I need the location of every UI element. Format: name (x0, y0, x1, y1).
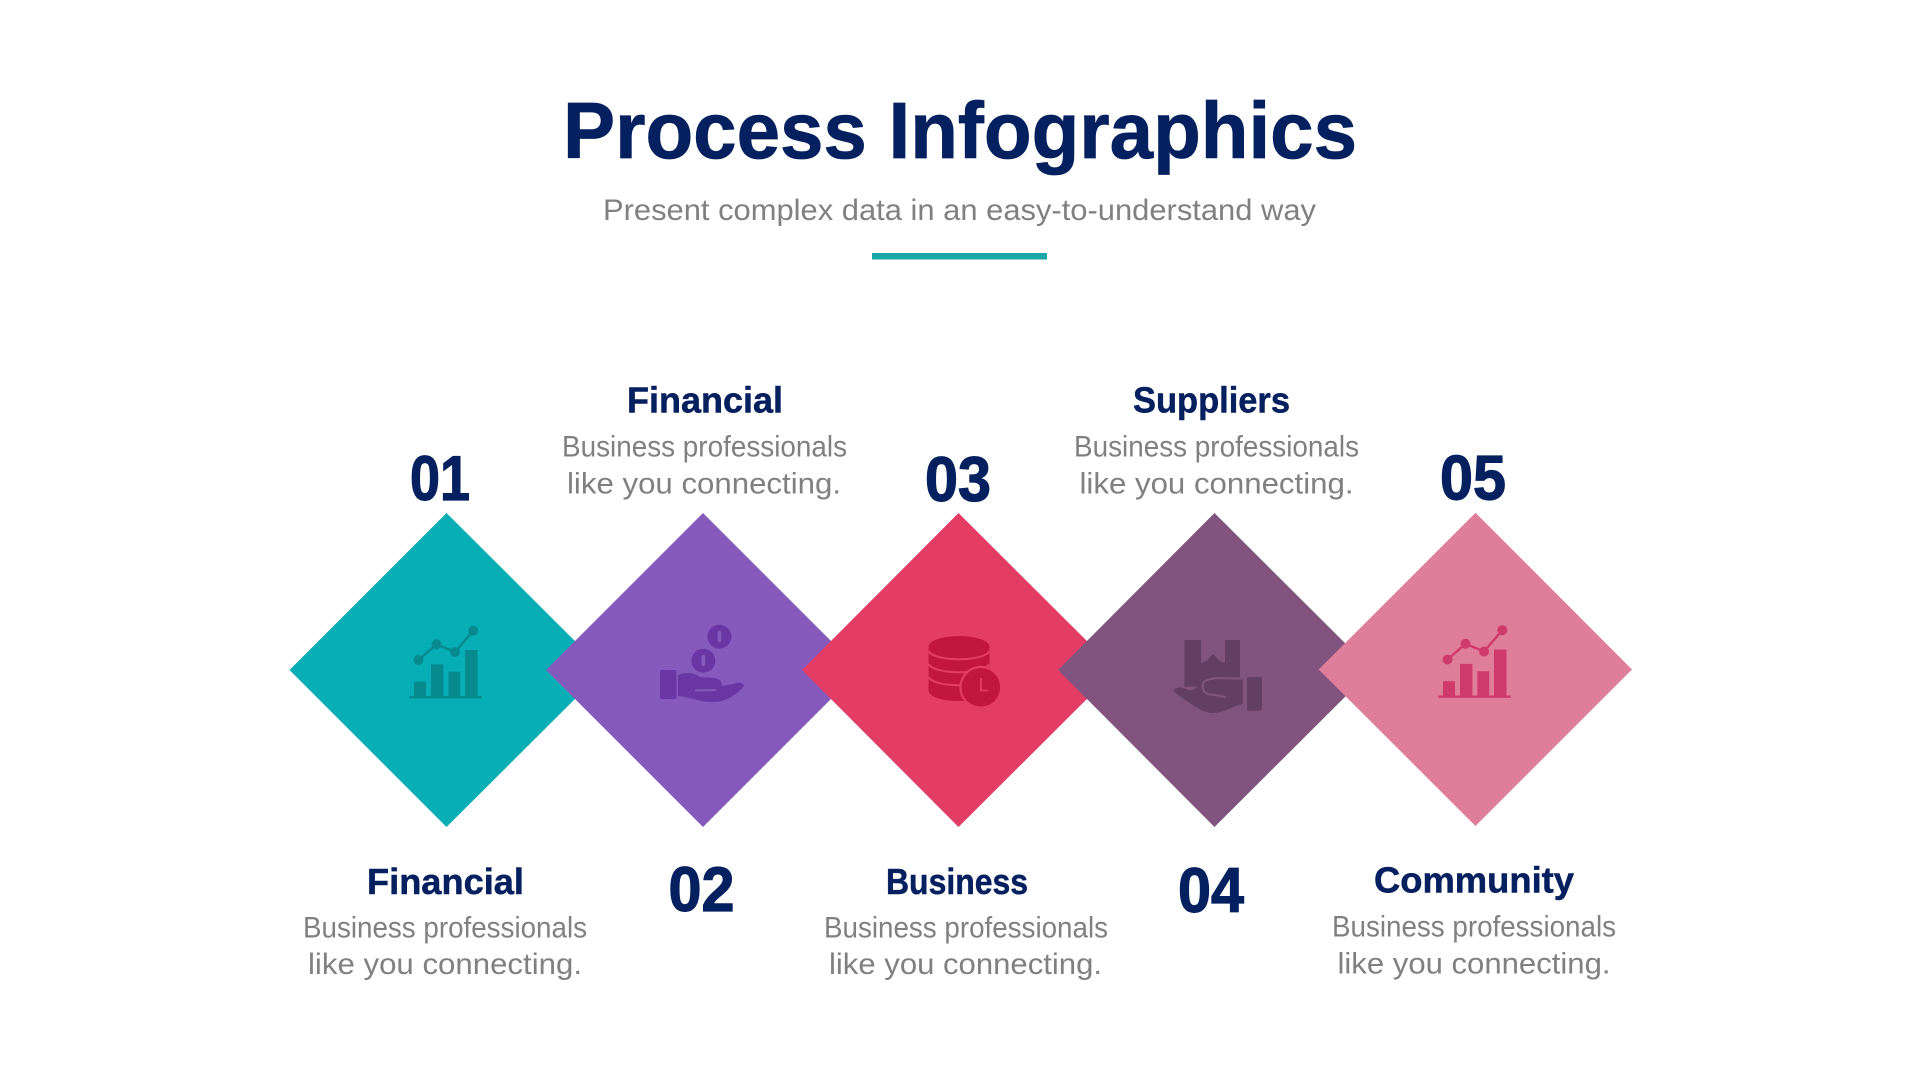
body text 01: Business professionals (303, 912, 587, 944)
diamond 01 (290, 513, 604, 827)
step 05 (1319, 444, 1632, 980)
accent underline (872, 253, 1047, 260)
body text 02: Business professionals (562, 431, 847, 464)
diamond 03 (802, 513, 1116, 827)
heading: Financial: Financial (627, 380, 783, 421)
number 05: 05 (1440, 444, 1506, 514)
icon: bar chart with trend line (1438, 625, 1511, 698)
header (563, 86, 1357, 260)
subtitle: Present complex data in an easy-to-understand way (603, 194, 1316, 227)
step 03 (802, 445, 1116, 981)
step 01 (290, 444, 604, 981)
diamond 04 (1058, 513, 1372, 827)
body text 03: Business professionals (824, 912, 1108, 944)
diamond 05 (1319, 513, 1632, 826)
icon: hand with coins (660, 625, 744, 702)
heading: Suppliers: Suppliers (1133, 380, 1290, 421)
number 03: 03 (925, 445, 991, 515)
title: Process Infographics (563, 86, 1357, 175)
step 02 (546, 380, 860, 925)
body text 04: like you connecting. (1080, 467, 1354, 500)
step 04 (1058, 380, 1372, 926)
icon: database with clock (928, 636, 1002, 709)
body text 01: like you connecting. (308, 948, 582, 981)
number 04: 04 (1178, 856, 1244, 926)
number 02: 02 (668, 855, 734, 925)
body text 03: like you connecting. (829, 948, 1102, 981)
number 01: 01 (410, 444, 470, 514)
body text 04: Business professionals (1074, 431, 1359, 464)
diamond 02 (546, 513, 860, 827)
heading: Financial: Financial (367, 861, 524, 902)
icon: hand holding package (1173, 640, 1262, 713)
heading: Community: Community (1374, 860, 1574, 901)
body text 05: Business professionals (1332, 911, 1616, 944)
body text 02: like you connecting. (567, 467, 841, 500)
icon: bar chart with trend line (409, 626, 482, 698)
body text 05: like you connecting. (1338, 947, 1610, 980)
heading: Business: Business (886, 861, 1028, 902)
